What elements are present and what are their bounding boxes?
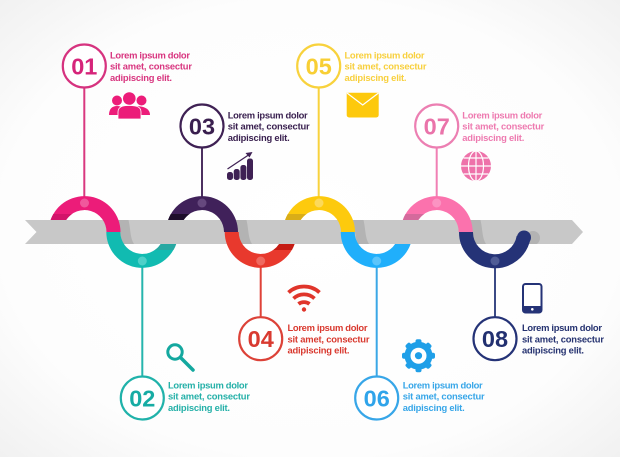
text 04: adipiscing elit.: [288, 345, 350, 356]
text 07: sit amet, consectur: [462, 121, 545, 132]
connector line 04: [260, 262, 262, 318]
number badge 07: [415, 104, 458, 148]
text 05: adipiscing elit.: [344, 72, 406, 83]
arc 01: [51, 196, 120, 232]
number badge 06: 06: [364, 385, 390, 411]
step 02: teal: [106, 232, 250, 420]
text 01: [110, 49, 192, 83]
number badge 04: 04: [248, 326, 274, 352]
step 04: red: [225, 232, 370, 360]
icon: globe: [461, 151, 491, 181]
step 01: pink: [51, 44, 192, 232]
step 06: blue: [341, 232, 485, 420]
icon: wifi: [288, 286, 320, 311]
text 01: Lorem ipsum dolor: [110, 49, 190, 60]
text 05: Lorem ipsum dolor: [344, 49, 425, 60]
arc 05: [285, 196, 355, 232]
number badge 01: [63, 44, 106, 88]
text 02: [168, 379, 250, 413]
number badge 03: 03: [189, 113, 215, 139]
arc 03: [168, 196, 238, 232]
text 07: [462, 109, 545, 143]
text 02: sit amet, consectur: [168, 391, 250, 402]
text 04: [288, 322, 370, 356]
text 07: Lorem ipsum dolor: [462, 109, 543, 120]
text 03: [228, 109, 310, 143]
number badge 03: [180, 104, 224, 148]
connector line 02: [141, 262, 143, 377]
step 07: light pink: [403, 104, 545, 232]
text 06: [403, 379, 485, 413]
number badge 01: 01: [71, 53, 97, 79]
text 06: Lorem ipsum dolor: [403, 379, 483, 390]
text 01: adipiscing elit.: [110, 72, 172, 83]
text 06: sit amet, consectur: [403, 391, 485, 402]
text 05: [344, 49, 427, 83]
icon: growth chart: [227, 152, 253, 180]
arc 04: [225, 232, 295, 268]
text 05: sit amet, consectur: [344, 61, 427, 72]
text 04: sit amet, consectur: [288, 333, 370, 344]
connector line 03: [201, 148, 203, 203]
arc 07: [403, 196, 473, 232]
arc 02: [106, 232, 176, 268]
connector line 05: [318, 88, 320, 203]
number badge 05: [297, 44, 340, 88]
text 03: Lorem ipsum dolor: [228, 109, 308, 120]
connector line 01: [83, 88, 85, 203]
number badge 08: 08: [482, 326, 508, 352]
ribbon shadows cast by the curve: [118, 220, 540, 245]
text 03: sit amet, consectur: [228, 121, 310, 132]
step 03: purple: [168, 104, 310, 232]
text 02: adipiscing elit.: [168, 402, 230, 413]
text 08: [522, 322, 604, 356]
text 08: sit amet, consectur: [522, 333, 604, 344]
step 08: navy: [466, 230, 604, 360]
icon: people: [109, 92, 150, 119]
icon: magnifier: [168, 345, 193, 370]
number badge 02: [121, 376, 164, 420]
text 08: Lorem ipsum dolor: [522, 322, 602, 333]
ribbon arrow band: [25, 220, 583, 244]
number badge 07: 07: [424, 113, 450, 139]
text 03: adipiscing elit.: [228, 132, 290, 143]
text 04: Lorem ipsum dolor: [288, 322, 368, 333]
connector line 07: [436, 148, 438, 203]
connector line 06: [376, 262, 378, 377]
arc 06: [341, 232, 411, 268]
icon: smartphone: [523, 284, 542, 312]
number badge 05: 05: [306, 53, 332, 79]
text 02: Lorem ipsum dolor: [168, 379, 248, 390]
text 06: adipiscing elit.: [403, 402, 465, 413]
text 07: adipiscing elit.: [462, 132, 524, 143]
arc 08: [466, 230, 531, 266]
text 01: sit amet, consectur: [110, 61, 192, 72]
number badge 02: 02: [129, 385, 155, 411]
step 05: yellow: [285, 44, 427, 232]
text 08: adipiscing elit.: [522, 345, 584, 356]
number badge 04: [239, 317, 282, 360]
number badge 06: [355, 376, 398, 420]
icon: gear: [402, 339, 435, 372]
icon: envelope: [347, 93, 379, 118]
connector line 08: [494, 262, 496, 318]
